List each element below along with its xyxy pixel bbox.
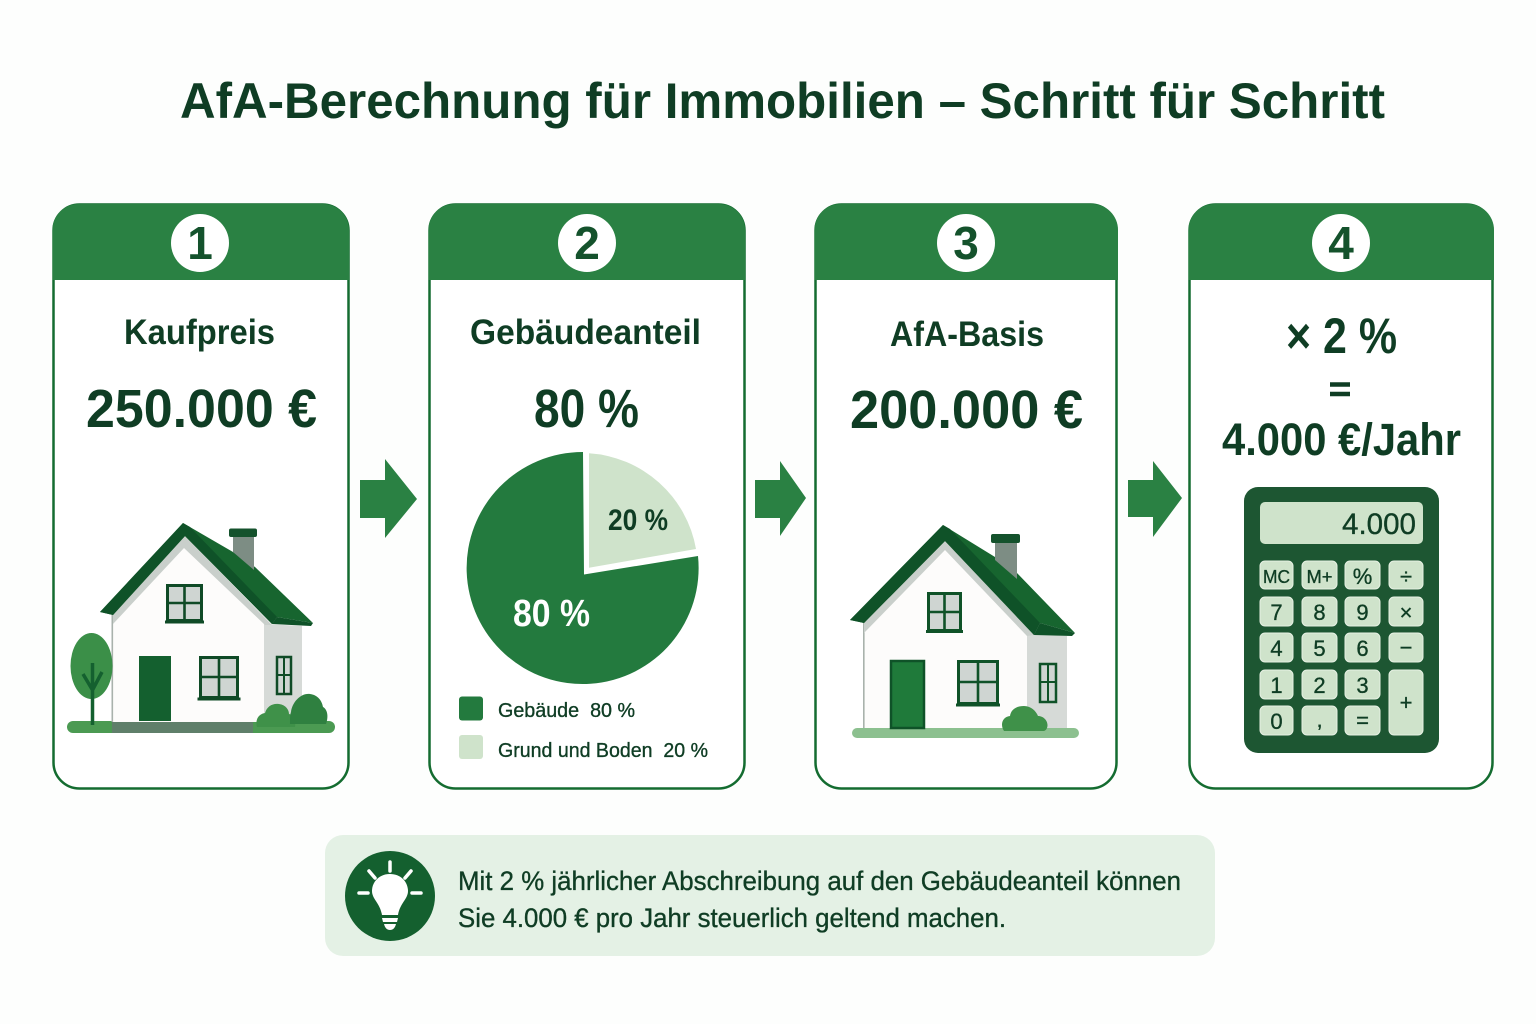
icon: calculator: 2 [1313, 673, 1326, 698]
panel: step 4 Ergebnis [1188, 204, 1494, 788]
icon: light bulb [345, 851, 435, 941]
icon: calculator: % [1353, 564, 1372, 589]
icon: calculator: × [1400, 600, 1412, 625]
icon: calculator: = [1356, 708, 1369, 733]
arrow: step 2 to 3 [755, 461, 806, 536]
equals sign [1330, 384, 1350, 394]
icon: calculator: 4 [1270, 636, 1283, 661]
step number 2: 2 [574, 217, 600, 269]
icon: calculator [1244, 487, 1439, 753]
heading Kaufpreis: Kaufpreis [124, 313, 275, 352]
icon: house [850, 525, 1079, 738]
legend [459, 696, 708, 762]
callout text: Sie 4.000 € pro Jahr steuerlich geltend machen. [458, 903, 1006, 933]
icon: calculator: 7 [1270, 600, 1283, 625]
pie chart 80/20 [467, 452, 699, 684]
icon: calculator: 4.000 [1342, 508, 1416, 541]
value 250.000 €: 250.000 € [86, 379, 317, 439]
step number 1 [171, 214, 229, 272]
value × 2 %: × 2 % [1286, 308, 1397, 364]
panel: step 1 Kaufpreis [52, 204, 349, 788]
header band 2 [428, 204, 745, 280]
icon: calculator: 0 [1270, 709, 1283, 734]
result 4.000 €/Jahr: 4.000 €/Jahr [1222, 414, 1461, 465]
arrow: step 3 to 4 [1128, 461, 1182, 537]
step number 3 [937, 214, 995, 272]
icon: calculator: 6 [1356, 636, 1369, 661]
header band 4 [1188, 204, 1494, 280]
icon: calculator: 9 [1356, 600, 1369, 625]
icon: calculator: M+ [1306, 567, 1332, 587]
icon: calculator: 8 [1313, 600, 1326, 625]
pie chart 80/20: 20 % [608, 504, 668, 537]
legend: Gebäude 80 % [498, 700, 635, 722]
header band 1 [52, 204, 349, 280]
header band 3 [814, 204, 1118, 280]
callout text [458, 866, 1181, 933]
value 80 %: 80 % [534, 379, 639, 439]
title: AfA-Berechnung für Immobilien – Schritt für Schritt [180, 73, 1385, 129]
icon: calculator: 3 [1356, 673, 1369, 698]
callout text: Mit 2 % jährlicher Abschreibung auf den Gebäudeanteil können [458, 866, 1181, 896]
heading Gebäudeanteil: Gebäudeanteil [470, 313, 701, 352]
icon: calculator: − [1400, 635, 1412, 660]
icon: calculator: ÷ [1400, 564, 1412, 589]
step number 1: 1 [187, 217, 213, 269]
legend: Grund und Boden 20 % [498, 740, 708, 762]
pie chart 80/20: 80 % [513, 593, 590, 635]
callout: tip [325, 835, 1215, 956]
step number 2 [558, 214, 616, 272]
step number 4: 4 [1328, 217, 1354, 269]
value 200.000 €: 200.000 € [850, 380, 1083, 440]
step number 3: 3 [953, 217, 979, 269]
panel: step 2 Gebäudeanteil [428, 204, 745, 788]
icon: calculator: 1 [1270, 673, 1283, 698]
panel: step 3 AfA-Basis [814, 204, 1118, 788]
heading AfA-Basis: AfA-Basis [890, 315, 1044, 354]
icon: calculator: 5 [1313, 636, 1326, 661]
arrow: step 1 to 2 [360, 459, 417, 538]
step number 4 [1312, 214, 1370, 272]
icon: house with tree [67, 523, 335, 733]
icon: calculator: + [1400, 690, 1412, 715]
icon: calculator: , [1316, 707, 1323, 732]
icon: calculator: MC [1263, 567, 1290, 587]
